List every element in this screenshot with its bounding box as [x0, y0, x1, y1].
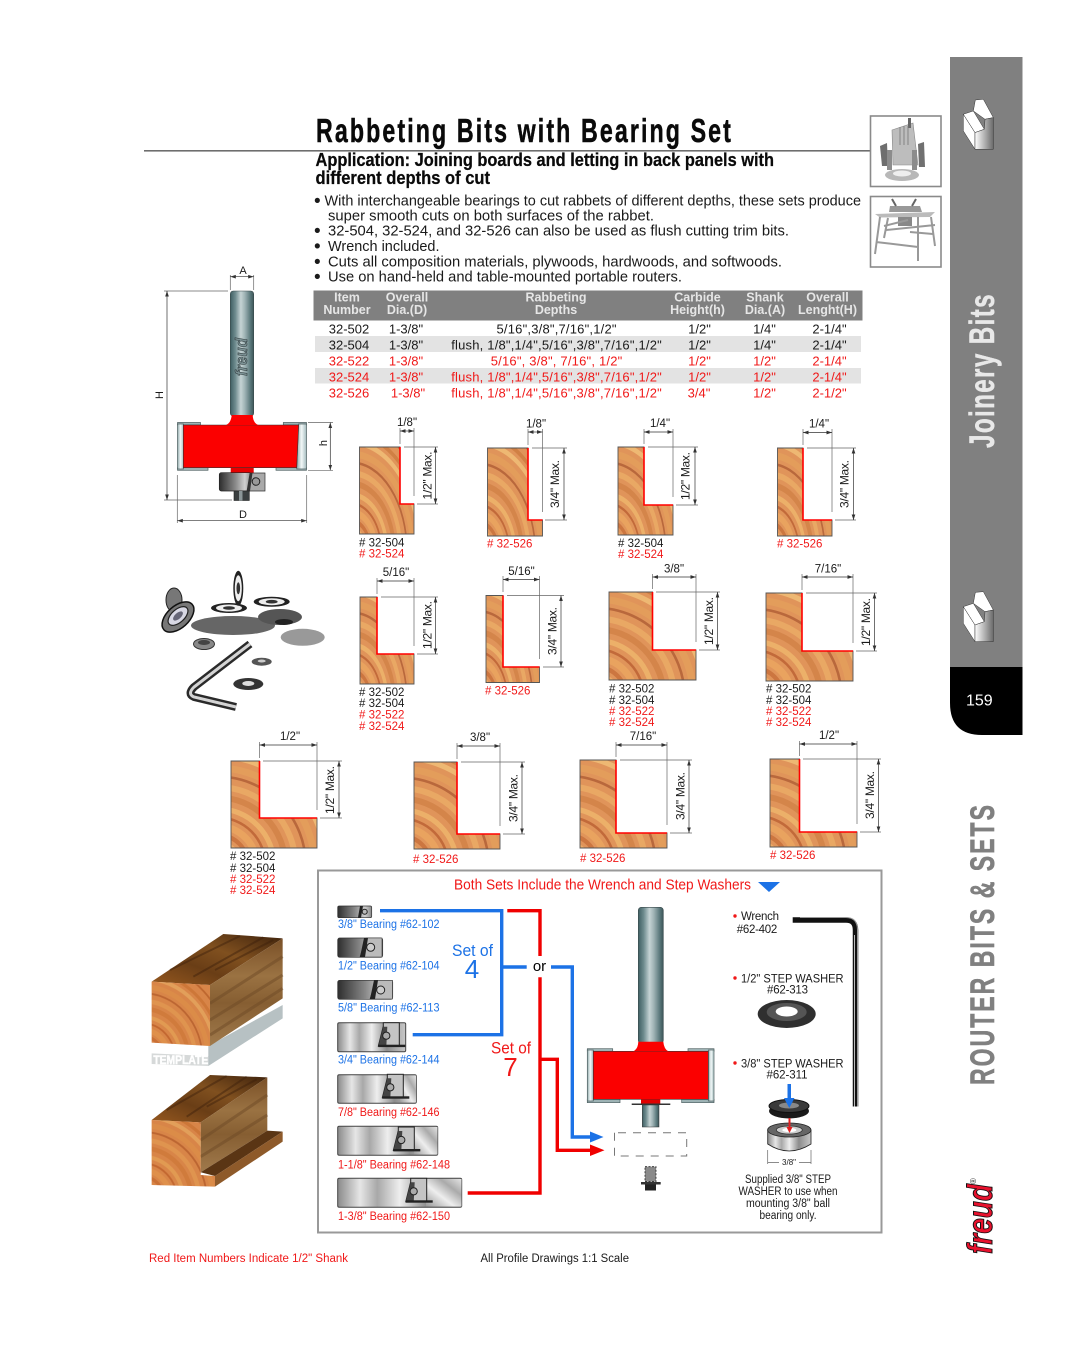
profile: 1/8 3/4 max: 1/8"	[526, 418, 546, 430]
icon: rabbet profile bottom	[963, 592, 993, 642]
wrench label	[733, 911, 779, 936]
table rows: 32-524	[329, 370, 369, 384]
table rows: 1-3/8"	[389, 354, 424, 368]
icon: router table	[870, 196, 941, 267]
bullet list: With interchangeable bearings to cut rabbets of different depths, these sets produce	[324, 192, 861, 210]
table rows: 1-3/8"	[389, 370, 424, 384]
table header: Carbide	[674, 290, 721, 304]
profile: 5/16 1/2 max: 1/2" Max.	[420, 601, 434, 649]
profile: 1/4 3/4 max	[777, 418, 856, 550]
table header: Lenght(H)	[798, 303, 857, 317]
half inch step washer: 1/2" STEP WASHER	[741, 974, 844, 986]
connector: blue set of 4: 4	[465, 954, 479, 984]
profile: 1/4 1/2 max: # 32-504	[618, 538, 664, 550]
table header: Dia.(D)	[387, 303, 427, 317]
table rows: 1-3/8"	[389, 322, 424, 336]
label: or: or	[533, 958, 546, 975]
logo: freud: ®	[969, 1178, 978, 1184]
profile: 1/8 1/2 max: # 32-504	[359, 538, 405, 550]
profile: 3/8 3/4 max: # 32-526	[413, 854, 458, 866]
table rows: 1/2"	[688, 338, 711, 352]
profile: 1/4 1/2 max: 1/2" Max.	[678, 452, 692, 500]
profile: 1/2 1/2 max: 1/2" Max.	[323, 766, 337, 814]
subheading: application: Application: Joining boards and letting in back panels with	[316, 150, 774, 170]
table rows: 3/4"	[688, 386, 711, 400]
profile: 1/8 3/4 max: # 32-526	[487, 538, 532, 550]
profile: 5/16 3/4 max: # 32-526	[485, 686, 530, 698]
profile: 3/8 3/4 max: 3/4" Max.	[506, 774, 520, 822]
dimension lines: A	[239, 265, 247, 277]
connector: red set of 7: 7	[503, 1052, 518, 1082]
table rows: 1-3/8"	[389, 338, 424, 352]
step washer note	[738, 1174, 838, 1222]
step washer note: WASHER to use when	[738, 1186, 838, 1198]
sidebar: joinery bits tab	[950, 57, 1022, 667]
connector: blue set of 4	[380, 911, 604, 1142]
profile: 5/16 3/4 max	[485, 566, 564, 698]
router bit dimension drawing	[154, 265, 333, 523]
half inch step washer	[733, 974, 844, 1028]
bearing 7/8: 7/8" Bearing #62-146	[338, 1107, 440, 1119]
profile: 5/16 1/2 max: # 32-522	[359, 710, 404, 722]
logo: freud: freud	[961, 1184, 1000, 1254]
bullet list: •	[314, 252, 321, 273]
heading: joinery bits: Joinery Bits	[963, 293, 1002, 448]
subheading: application: different depths of cut	[316, 168, 490, 188]
bullet list: •	[314, 191, 321, 212]
icon: blue triangle	[758, 882, 780, 892]
bearing on bit	[219, 473, 265, 500]
profile: 1/8 1/2 max: # 32-524	[359, 548, 405, 560]
profile: 1/8 3/4 max	[487, 418, 567, 550]
bearing 5/8: 5/8" Bearing #62-113	[338, 1002, 440, 1014]
table rows: 2-1/4"	[812, 370, 847, 384]
profile: 5/16 3/4 max: 5/16"	[508, 566, 535, 578]
icon: rabbet profile top	[963, 99, 993, 149]
blue down arrow	[784, 1084, 794, 1108]
footnote: red item numbers: Red Item Numbers Indicate 1/2" Shank	[149, 1253, 348, 1265]
table rows: flush, 1/8",1/4",5/16",3/8",7/16",1/2"	[451, 386, 662, 400]
bearing 1-1/8: 1-1/8" Bearing #62-148	[338, 1160, 450, 1172]
subheading: application	[316, 150, 774, 188]
half inch step washer: #62-313	[767, 984, 808, 996]
profile: 7/16 1/2 max: 1/2" Max.	[859, 598, 873, 646]
table rows: 32-526	[329, 386, 369, 400]
profile: 1/4 1/2 max: 1/4"	[650, 418, 670, 430]
table rows: 5/16",3/8",7/16",1/2"	[496, 322, 617, 336]
dashed bearing placeholder	[614, 1133, 687, 1156]
table header: Dia.(A)	[745, 303, 785, 317]
bearing 1-1/8	[338, 1126, 450, 1172]
profile: 3/8 3/4 max	[413, 732, 525, 866]
profile: 1/2 1/2 max: # 32-524	[230, 885, 276, 897]
step washer note: mounting 3/8" ball	[746, 1198, 830, 1210]
bullet list: •	[314, 221, 321, 242]
profile: 3/8 1/2 max	[609, 564, 720, 729]
bearing 3/8: 3/8" Bearing #62-102	[338, 919, 440, 931]
profile: 1/2 3/4 max: 3/4" Max.	[863, 771, 877, 819]
bearing 3/4: 3/4" Bearing #62-144	[338, 1054, 440, 1066]
photo: bearings, washers and wrench	[157, 571, 325, 707]
table header: Rabbeting	[525, 290, 587, 304]
bullet list: •	[314, 267, 321, 288]
arbor screw	[641, 1167, 661, 1190]
table header: Height(h)	[670, 303, 725, 317]
profile: 1/8 1/2 max	[359, 417, 438, 560]
bearing 1/2	[338, 938, 440, 972]
profile: 1/2 1/2 max: 1/2"	[280, 731, 300, 743]
bearing 5/8	[338, 980, 440, 1014]
table header: Overall	[386, 290, 428, 304]
table rows: flush, 1/8",1/4",5/16",3/8",7/16",1/2"	[451, 338, 662, 352]
profile: 5/16 1/2 max: 5/16"	[383, 567, 409, 579]
page number tab: 159	[966, 692, 993, 710]
table rows: 32-522	[329, 354, 369, 368]
profile: 7/16 1/2 max: # 32-502	[766, 684, 811, 696]
bullet list: 32-504, 32-524, and 32-526 can also be used as flush cutting trim bits.	[328, 222, 789, 240]
sidebar text: router bits and sets: ROUTER BITS & SETS	[964, 803, 1002, 1085]
table rows: 1/4"	[753, 322, 776, 336]
panel heading: Both Sets Include the Wrench and Step Washers	[454, 878, 751, 894]
bullet list: super smooth cuts on both surfaces of the rabbet.	[328, 208, 654, 224]
profile: 1/4 1/2 max	[618, 418, 698, 561]
icon: plunge router	[870, 116, 941, 186]
profile: 7/16 1/2 max: # 32-522	[766, 706, 811, 718]
profile: 1/2 1/2 max	[230, 731, 342, 897]
bearing 1-3/8: 1-3/8" Bearing #62-150	[338, 1211, 450, 1223]
wrench label: #62-402	[737, 924, 777, 936]
table header: Overall	[806, 290, 849, 304]
profile: 1/4 3/4 max: # 32-526	[777, 538, 822, 550]
profile: 3/8 1/2 max: 3/8"	[664, 564, 684, 576]
three-eighths step washer	[733, 1058, 844, 1151]
dimension lines: H	[154, 391, 166, 399]
profile: 7/16 1/2 max	[766, 564, 877, 729]
bullet list: Cuts all composition materials, plywoods, hardwoods, and softwoods.	[328, 254, 782, 270]
profile: 7/16 1/2 max: # 32-524	[766, 717, 812, 729]
profile: 3/8 1/2 max: # 32-502	[609, 684, 654, 696]
profile: 1/2 3/4 max	[770, 730, 881, 862]
wrench drawing	[793, 918, 858, 1106]
profile: 5/16 1/2 max: # 32-524	[359, 721, 405, 733]
dimension lines	[154, 265, 333, 523]
profile: 1/2 1/2 max: # 32-502	[230, 851, 275, 863]
wood block with template	[152, 934, 283, 1067]
profile: 7/16 1/2 max: 7/16"	[815, 564, 841, 576]
profile: 7/16 1/2 max: # 32-504	[766, 695, 812, 707]
table header: Depths	[535, 303, 577, 317]
profile: 3/8 3/4 max: 3/8"	[470, 732, 490, 744]
profile: 5/16 1/2 max	[359, 567, 438, 733]
wood block rabbeted	[152, 1075, 283, 1187]
wrench label: Wrench	[741, 911, 779, 923]
profile: 5/16 1/2 max: # 32-504	[359, 698, 405, 710]
table rows: 1/2"	[688, 322, 711, 336]
table header: Number	[323, 303, 371, 317]
table header	[314, 290, 862, 320]
connector: red set of 7	[468, 911, 604, 1193]
profile: 3/8 1/2 max: 1/2" Max.	[702, 597, 716, 645]
profile: 1/2 1/2 max: # 32-522	[230, 874, 275, 886]
profile: 1/4 3/4 max: 3/4" Max.	[838, 460, 852, 508]
profile: 7/16 3/4 max	[580, 731, 692, 865]
step washer note: Supplied 3/8" STEP	[745, 1174, 831, 1186]
bearing width dimension: 3/8"	[782, 1158, 796, 1167]
dimension lines: D	[239, 509, 247, 521]
profile: 1/8 1/2 max: 1/2" Max.	[420, 452, 434, 500]
connector: blue set of 4: Set of	[452, 942, 493, 960]
table rows: 5/16", 3/8", 7/16", 1/2"	[491, 354, 623, 368]
table rows: 1/2"	[753, 370, 776, 384]
table rows: 2-1/2"	[812, 386, 847, 400]
table rows: 1/2"	[753, 354, 776, 368]
table rows: flush, 1/8",1/4",5/16",3/8",7/16",1/2"	[451, 370, 662, 384]
bearing 7/8	[338, 1074, 440, 1119]
profile: 5/16 1/2 max: # 32-502	[359, 687, 404, 699]
three-eighths step washer: #62-311	[766, 1070, 808, 1082]
page number tab	[950, 667, 1022, 735]
bearing width dimension	[768, 1150, 811, 1167]
title: Rabbeting Bits with Bearing Set	[316, 112, 733, 149]
profile: 1/2 3/4 max: 1/2"	[819, 730, 839, 742]
profile: 3/8 1/2 max: # 32-504	[609, 695, 655, 707]
profile: 7/16 3/4 max: 7/16"	[630, 731, 656, 743]
dimension lines: h	[318, 440, 330, 446]
profile: 7/16 3/4 max: # 32-526	[580, 853, 625, 865]
bearing 1/2: 1/2" Bearing #62-104	[338, 960, 440, 972]
footnote: scale: All Profile Drawings 1:1 Scale	[480, 1253, 629, 1265]
profile: 1/8 1/2 max: 1/8"	[397, 417, 417, 429]
bearing 1-3/8	[338, 1178, 462, 1223]
table rows: 1/2"	[688, 354, 711, 368]
table rows	[329, 322, 847, 400]
specifications table	[314, 290, 862, 400]
panel: included bearings and washers	[318, 870, 882, 1232]
table rows: 32-504	[329, 338, 369, 352]
bullet list	[314, 191, 861, 288]
table rows: 1/4"	[753, 338, 776, 352]
bullet list: Wrench included.	[328, 238, 440, 255]
connector: red set of 7: Set of	[491, 1040, 531, 1058]
bullet list: Use on hand-held and table-mounted portable routers.	[328, 268, 682, 286]
table header: Item	[334, 290, 360, 304]
bearing 3/8	[338, 906, 440, 931]
logo on shank: freud	[232, 337, 251, 376]
step washer note: bearing only.	[760, 1210, 816, 1222]
profile: 7/16 3/4 max: 3/4" Max.	[674, 772, 688, 820]
profile: 1/4 3/4 max: 1/4"	[809, 418, 829, 430]
table rows: 2-1/4"	[812, 354, 847, 368]
table rows: 2-1/4"	[812, 322, 847, 336]
table rows: 32-502	[329, 322, 369, 336]
profile: 1/4 1/2 max: # 32-524	[618, 549, 664, 561]
bullet list: •	[314, 236, 321, 258]
wood block with template: TEMPLATE	[153, 1053, 208, 1067]
profile: 1/8 3/4 max: 3/4" Max.	[548, 460, 562, 508]
bearing 3/4	[338, 1023, 440, 1066]
profile: 5/16 3/4 max: 3/4" Max.	[546, 607, 560, 655]
table rows: 1/2"	[688, 370, 711, 384]
table header: Shank	[746, 290, 784, 304]
profile: 1/2 3/4 max: # 32-526	[770, 850, 815, 862]
profile: 1/2 1/2 max: # 32-504	[230, 863, 276, 875]
three-eighths step washer: 3/8" STEP WASHER	[741, 1058, 844, 1070]
table rows: 1-3/8"	[391, 386, 426, 400]
profile: 3/8 1/2 max: # 32-524	[609, 717, 655, 729]
center router bit	[587, 907, 714, 1127]
table rows: 2-1/4"	[812, 338, 847, 352]
red down arrow	[786, 1118, 792, 1133]
profile: 3/8 1/2 max: # 32-522	[609, 706, 654, 718]
table rows: 1/2"	[753, 386, 776, 400]
